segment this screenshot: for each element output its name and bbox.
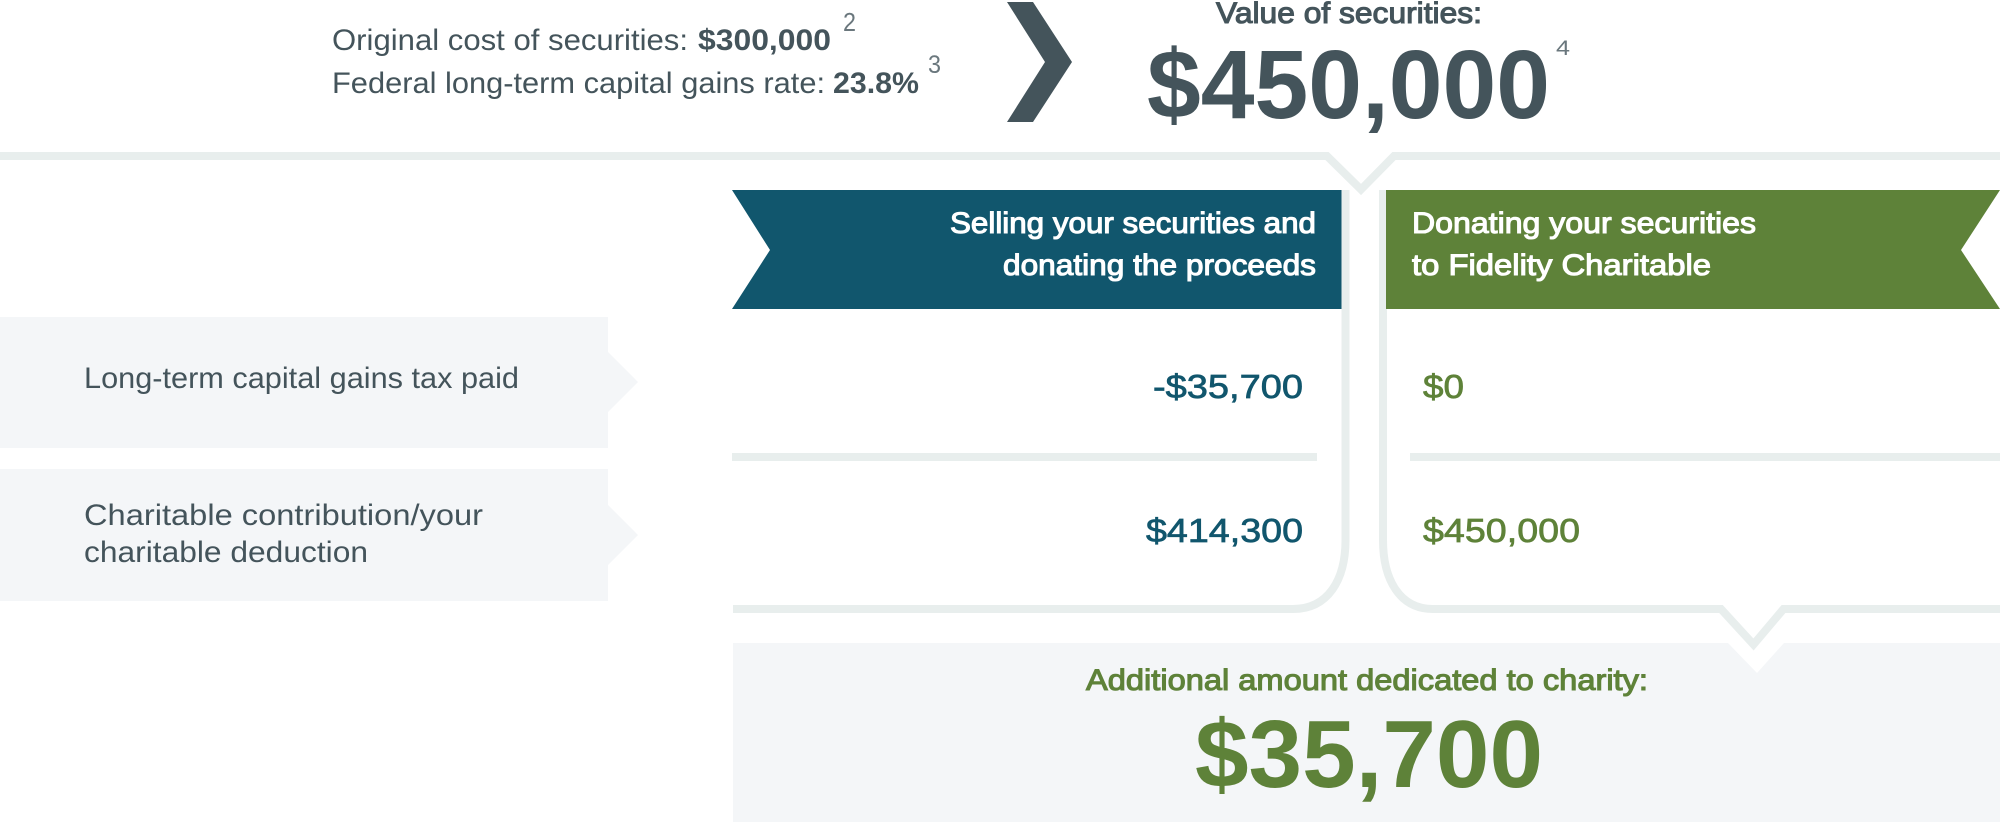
text: federal capital gains rate [332,51,941,100]
banner: donating your securities [1386,190,2000,309]
value: full contribution: $450,000 [1423,512,1580,549]
label: long-term capital gains tax paid [0,317,638,448]
text: value of securities: 4 [1556,37,1570,60]
banner: donating your securities: Donating your securities [1412,207,1756,240]
text: original cost of securities: $300,000 [698,24,831,57]
divider with pointer [0,156,2000,190]
panel: donating securities column [1383,190,2000,644]
banner: selling your securities [732,190,1342,309]
value: charitable contribution: $414,300 [1146,512,1303,549]
panel: selling securities column [732,190,1346,609]
text: original cost of securities: Original cost of securities: [332,24,688,57]
text: original cost of securities [332,7,856,57]
label: charitable contribution: charitable deduction [84,536,368,569]
text: federal capital gains rate: 3 [928,51,941,79]
text: federal capital gains rate: Federal long-term capital gains rate: [332,67,825,100]
panel: additional amount dedicated to charity [733,643,2000,822]
label: long-term capital gains tax paid: Long-term capital gains tax paid [84,362,519,395]
banner: selling your securities: Selling your securities and [950,207,1316,240]
panel: row labels [0,317,638,601]
text: value of securities: $450,000 [1147,30,1550,139]
column outline with pointer [1383,190,2000,644]
heading: additional amount: Additional amount dedicated to charity: [1086,664,1648,697]
value: zero tax: $0 [1423,368,1464,405]
text: federal capital gains rate: 23.8% [833,67,919,100]
row divider [1410,453,2000,461]
banner: donating your securities: to Fidelity Charitable [1412,249,1711,282]
column outline [733,190,1346,609]
arrow: chevron [1007,2,1072,122]
row divider [732,453,1317,461]
text: original cost of securities: 2 [843,7,856,37]
label: charitable contribution [0,469,638,601]
banner: selling your securities: donating the proceeds [1003,249,1316,282]
panel: securities summary [332,7,941,100]
figure: additional amount: $35,700 [1195,701,1543,808]
label: charitable contribution: Charitable contribution/your [84,499,483,532]
value: capital gains tax: -$35,700 [1153,368,1303,405]
